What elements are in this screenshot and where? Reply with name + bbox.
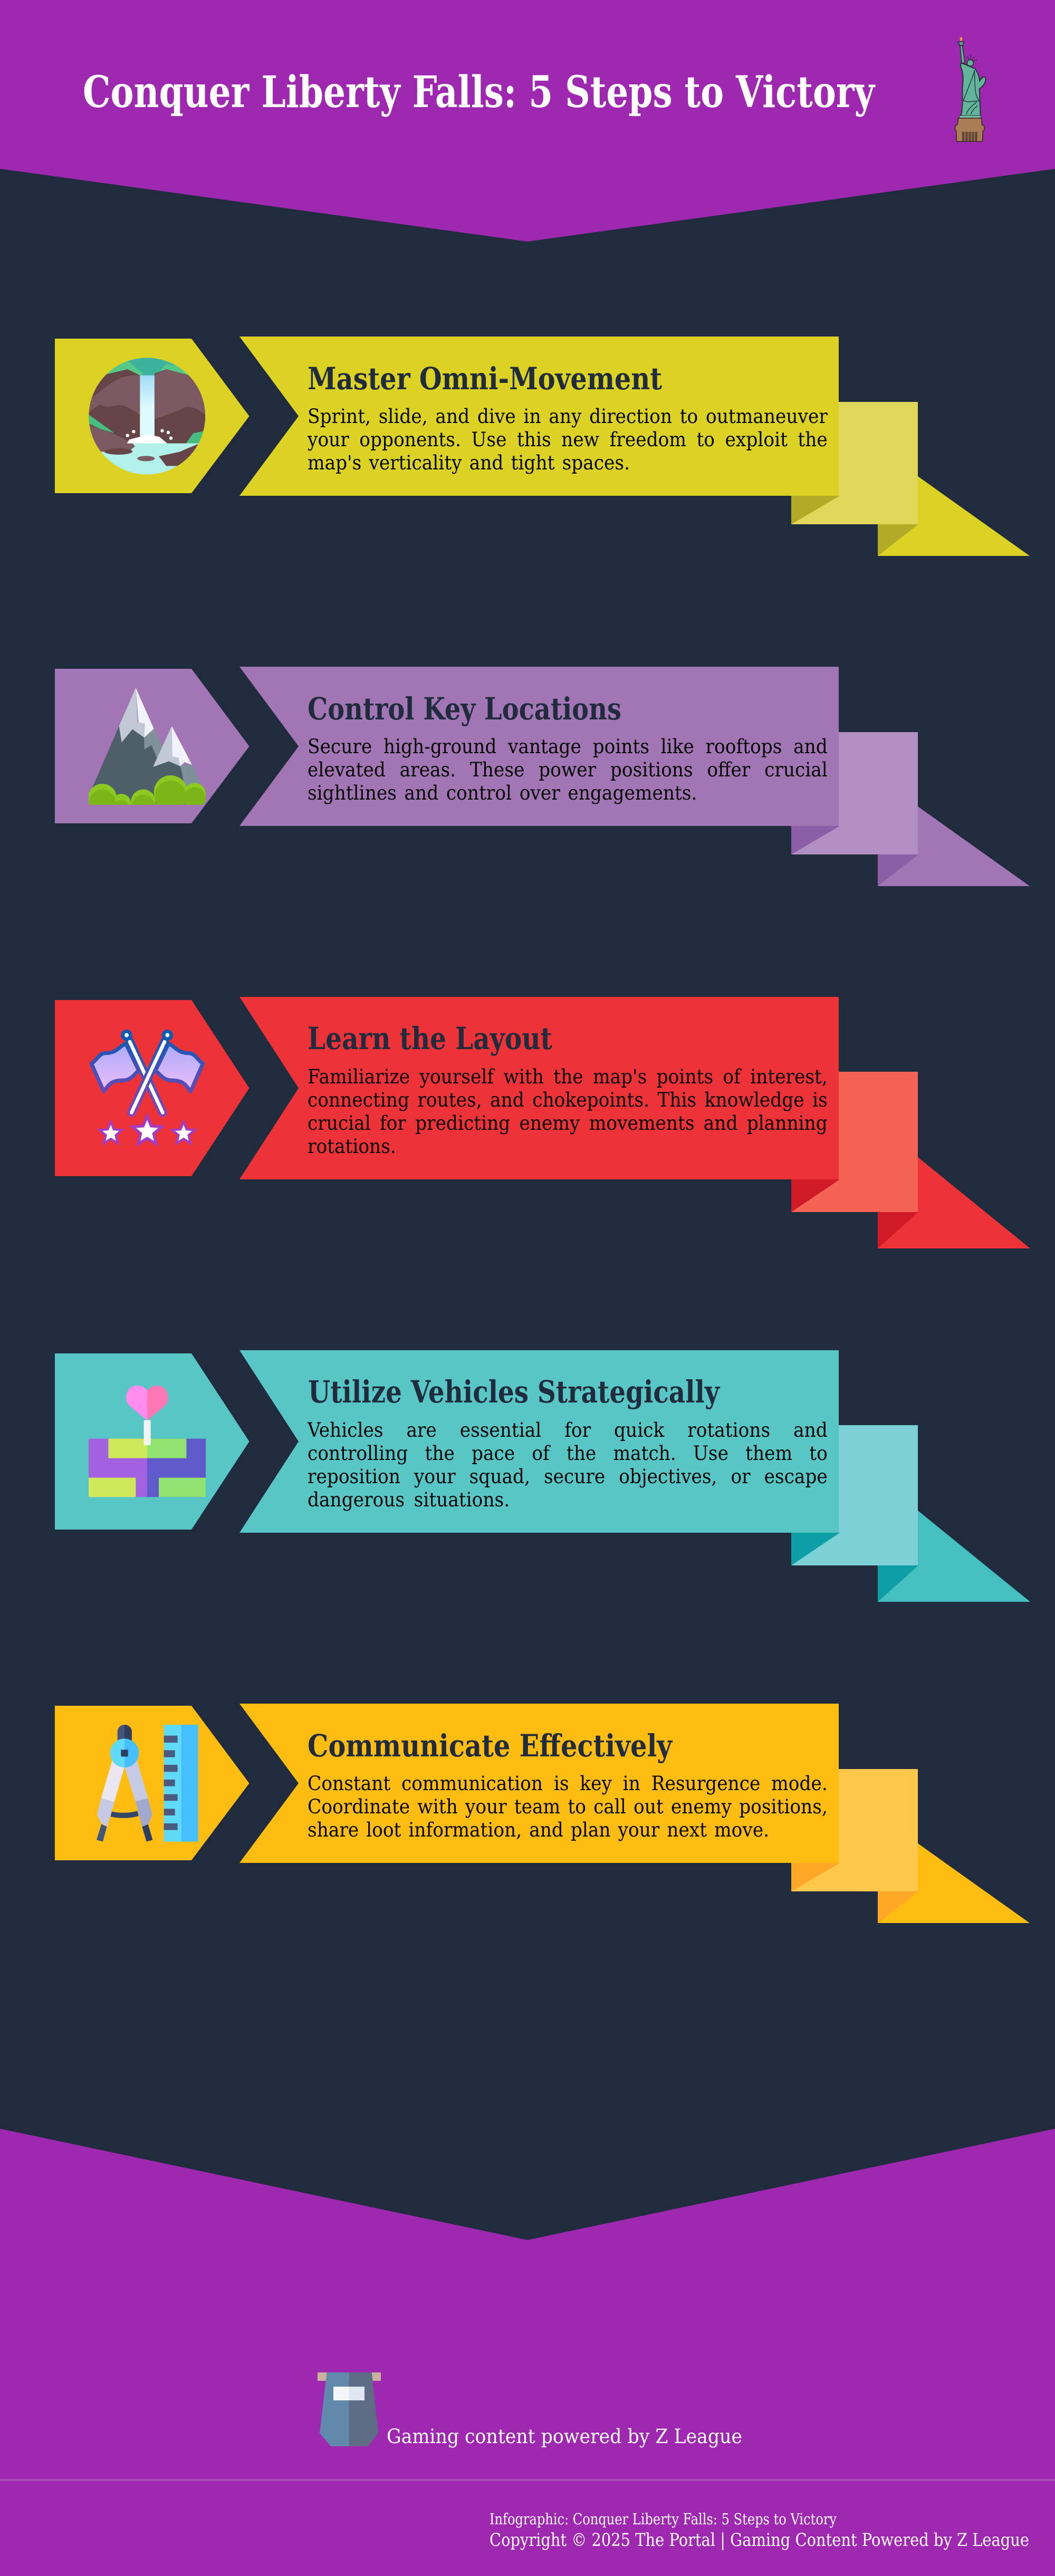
ribbon tail triangle bbox=[878, 1157, 1030, 1248]
icon: sponsor banner figure bbox=[318, 2372, 381, 2446]
footer band bbox=[0, 2129, 1055, 2576]
body text bbox=[307, 405, 828, 474]
icon: mountains bbox=[89, 688, 206, 805]
sponsor text: Gaming content powered by Z League bbox=[387, 2425, 742, 2448]
body text: elevated areas. These power positions offer crucial bbox=[308, 758, 828, 781]
body text: Secure high-ground vantage points like rooftops and bbox=[308, 735, 828, 758]
icon tab bbox=[55, 1353, 249, 1530]
banner bbox=[239, 1704, 839, 1863]
ribbon fold bbox=[791, 1425, 918, 1565]
heading: Learn the Layout bbox=[308, 1021, 552, 1056]
icon: waterfall bbox=[85, 356, 210, 476]
ribbon tail triangle bbox=[878, 806, 1030, 886]
body text: reposition your squad, secure objectives, or escape bbox=[308, 1465, 828, 1488]
panel: step 2 Control Key Locations bbox=[55, 667, 1030, 886]
body text: sightlines and control over engagements. bbox=[308, 782, 697, 804]
ribbon fold bbox=[791, 402, 918, 524]
body text: Sprint, slide, and dive in any direction to outmaneuver bbox=[308, 405, 828, 428]
ribbon tail triangle bbox=[878, 1843, 1030, 1923]
ribbon tail triangle bbox=[878, 1511, 1030, 1602]
title: Conquer Liberty Falls: 5 Steps to Victory bbox=[83, 67, 876, 118]
ribbon fold bbox=[791, 732, 918, 854]
banner bbox=[239, 997, 839, 1179]
header band bbox=[0, 0, 1055, 242]
body text: dangerous situations. bbox=[308, 1488, 510, 1511]
icon tab bbox=[55, 669, 249, 823]
icon: joystick heart block bbox=[89, 1386, 206, 1497]
icon: compass and ruler bbox=[97, 1725, 198, 1842]
panel: step 5 Communicate Effectively bbox=[55, 1704, 1030, 1923]
body text bbox=[308, 1065, 828, 1158]
ribbon fold bbox=[791, 1769, 918, 1891]
icon tab bbox=[55, 1706, 249, 1860]
body text: Coordinate with your team to call out enemy positions, bbox=[308, 1795, 828, 1818]
body text: controlling the pace of the match. Use them to bbox=[308, 1442, 828, 1465]
icon tab bbox=[55, 1000, 249, 1176]
heading: Master Omni-Movement bbox=[308, 361, 662, 397]
heading: Control Key Locations bbox=[308, 691, 621, 727]
body text: share loot information, and plan your next move. bbox=[308, 1819, 769, 1841]
body text: rotations. bbox=[308, 1135, 396, 1158]
body text: Vehicles are essential for quick rotations and bbox=[308, 1419, 828, 1441]
body text bbox=[308, 1772, 828, 1841]
body text: Constant communication is key in Resurgence mode. bbox=[308, 1772, 828, 1795]
panel: step 1 Master Omni-Movement bbox=[55, 337, 1030, 556]
banner bbox=[239, 1350, 839, 1533]
ribbon tail triangle bbox=[878, 476, 1030, 556]
ribbon fold bbox=[791, 1072, 918, 1212]
body text: connecting routes, and chokepoints. This knowledge is bbox=[308, 1089, 828, 1111]
body text: your opponents. Use this new freedom to exploit the bbox=[308, 428, 828, 451]
body text: Familiarize yourself with the map's points of interest, bbox=[308, 1065, 828, 1088]
panel: step 3 Learn the Layout bbox=[55, 997, 1030, 1248]
banner bbox=[239, 337, 839, 496]
heading: Utilize Vehicles Strategically bbox=[308, 1374, 721, 1410]
body text: crucial for predicting enemy movements and planning bbox=[308, 1112, 828, 1135]
icon: Statue of Liberty bbox=[955, 37, 986, 141]
body text: map's verticality and tight spaces. bbox=[308, 451, 630, 474]
body text bbox=[307, 1419, 828, 1511]
panel: step 4 Utilize Vehicles Strategically bbox=[55, 1350, 1030, 1602]
banner bbox=[239, 667, 839, 826]
heading: Communicate Effectively bbox=[308, 1728, 673, 1764]
body text bbox=[308, 735, 828, 804]
icon: crossed flags and stars bbox=[91, 1031, 203, 1145]
footer caption: Infographic: Conquer Liberty Falls: 5 Steps to Victory bbox=[490, 2510, 837, 2528]
icon tab bbox=[55, 339, 249, 493]
